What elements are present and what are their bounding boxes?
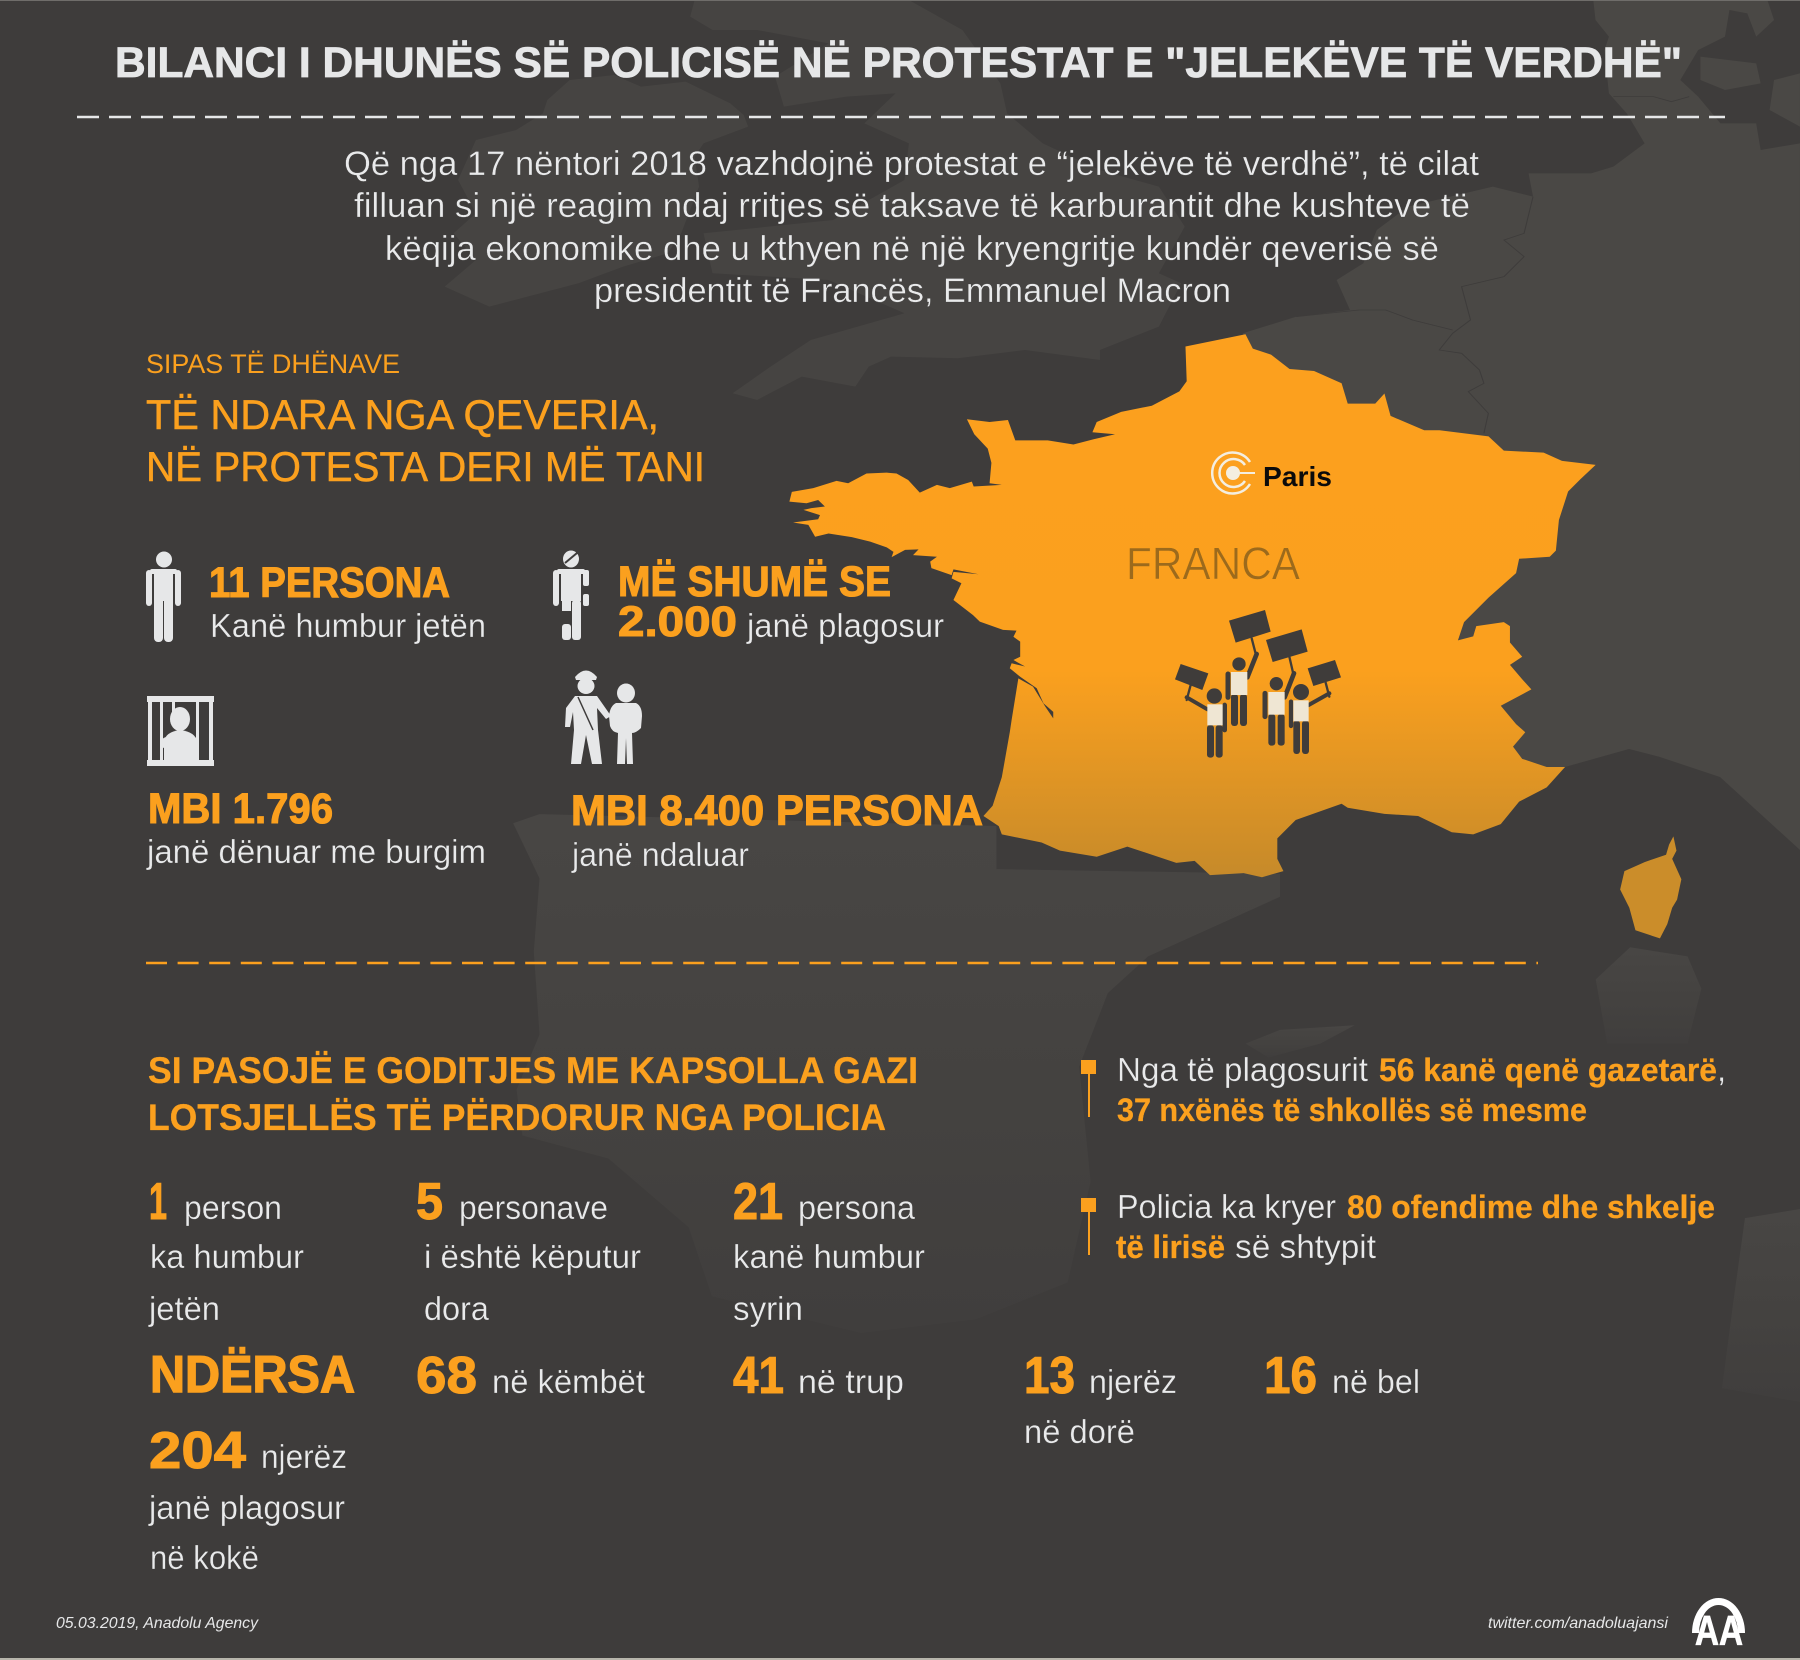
Corsica xyxy=(1620,836,1681,938)
stat: 204 injured in the head: në kokë xyxy=(150,1539,259,1576)
stat: 16 in waist: në bel xyxy=(1332,1363,1420,1400)
stat: 41 in body: në trup xyxy=(798,1363,904,1400)
stat: 204 injured in the head: 204 xyxy=(149,1422,246,1480)
bullet: press freedom violations: së shtypit xyxy=(1235,1228,1376,1265)
stat: sentenced to prison xyxy=(146,785,486,870)
bullet: journalists and students: Nga të plagosurit xyxy=(1117,1051,1368,1088)
stat: 41 in body xyxy=(733,1347,904,1405)
stat: 68 in legs: 68 xyxy=(416,1347,477,1405)
stat: 1 person lost life: 1 xyxy=(149,1173,167,1231)
stat: 5 persons lost a hand: 5 xyxy=(416,1173,443,1231)
heading: consequences of tear gas capsules: SI PASOJË E GODITJES ME KAPSOLLA GAZI xyxy=(148,1050,918,1091)
icon: prisoner behind bars xyxy=(147,696,214,766)
stat: 13 in hand: 13 xyxy=(1024,1347,1075,1405)
stat: 1 person lost life: ka humbur xyxy=(150,1238,304,1275)
stat: 21 persons lost an eye: persona xyxy=(798,1189,916,1226)
stat: 5 persons lost a hand xyxy=(416,1173,641,1327)
icon: protesters with signs xyxy=(1175,610,1341,758)
bullet: journalists and students: , xyxy=(1717,1051,1726,1088)
stat: 13 in hand: njerëz xyxy=(1089,1363,1177,1400)
stat: 21 persons lost an eye xyxy=(733,1173,925,1327)
stat: over 2000 injured: 2.000 xyxy=(618,598,737,646)
intro paragraph xyxy=(344,145,1480,310)
stat: 16 in waist: 16 xyxy=(1264,1347,1317,1405)
stat: 1 person lost life: person xyxy=(184,1189,282,1226)
stat: sentenced to prison: janë dënuar me burgim xyxy=(146,833,486,870)
stat: 1 person lost life xyxy=(148,1173,304,1327)
bullet: press freedom violations: Policia ka kryer xyxy=(1117,1188,1336,1225)
intro paragraph: Që nga 17 nëntori 2018 vazhdojnë protestat e “jelekëve të verdhë”, të cilat xyxy=(344,145,1480,183)
mainland France xyxy=(789,334,1596,877)
stat: 11 persons: Kanë humbur jetën xyxy=(210,607,486,644)
intro paragraph: presidentit të Francës, Emmanuel Macron xyxy=(594,272,1231,310)
stat: 13 in hand xyxy=(1024,1347,1177,1450)
heading: government data: SIPAS TË DHËNAVE xyxy=(146,349,400,379)
intro paragraph: këqija ekonomike dhe u kthyen në një kryengritje kundër qeverisë së xyxy=(385,230,1439,268)
footer: twitter handle: twitter.com/anadoluajansi xyxy=(1488,1615,1668,1632)
bullet: journalists and students: 37 nxënës të shkollës së mesme xyxy=(1117,1092,1587,1128)
footer: date and source: 05.03.2019, Anadolu Agency xyxy=(56,1615,259,1632)
stat: 204 injured in the head: janë plagosur xyxy=(148,1489,345,1526)
bullet: press freedom violations: 80 ofendime dhe shkelje xyxy=(1347,1189,1715,1225)
stat: over 8400 arrested: janë ndaluar xyxy=(571,836,749,873)
icon: police officer with detainee xyxy=(565,670,642,764)
label: France: FRANCA xyxy=(1126,538,1300,589)
stat: 21 persons lost an eye: syrin xyxy=(733,1290,803,1327)
stat: 11 persons: 11 PERSONA xyxy=(209,559,450,607)
intro paragraph: filluan si një reagim ndaj rritjes së taksave të karburantit dhe kushteve të xyxy=(354,187,1470,225)
title: BILANCI I DHUNËS SË POLICISË NË PROTESTAT E "JELEKËVE TË VERDHË" xyxy=(115,39,1682,87)
icon: person xyxy=(146,552,181,642)
bullet: press freedom violations: të lirisë xyxy=(1116,1229,1225,1265)
icon: injured person xyxy=(553,550,589,640)
stat: 21 persons lost an eye: kanë humbur xyxy=(733,1238,925,1275)
heading: government data: NË PROTESTA DERI MË TANI xyxy=(146,443,705,490)
heading: government data xyxy=(146,349,705,490)
bullet: press freedom violations xyxy=(1081,1188,1715,1265)
icon: Anadolu Agency logo xyxy=(1692,1598,1745,1654)
stat: 68 in legs xyxy=(416,1347,645,1405)
stat: 41 in body: 41 xyxy=(733,1347,784,1405)
bullet: journalists and students xyxy=(1081,1051,1726,1128)
stat: 5 persons lost a hand: personave xyxy=(459,1189,608,1226)
heading: government data: TË NDARA NGA QEVERIA, xyxy=(146,391,659,438)
stat: over 2000 injured: MË SHUMË SE xyxy=(618,558,891,606)
stat: 204 injured in the head xyxy=(148,1422,347,1576)
map of France xyxy=(789,334,1681,938)
stat: 21 persons lost an eye: 21 xyxy=(733,1173,783,1231)
stat: 5 persons lost a hand: i është këputur xyxy=(424,1238,641,1275)
bullet: journalists and students: 56 kanë qenë gazetarë xyxy=(1379,1052,1717,1088)
heading: consequences of tear gas capsules xyxy=(148,1050,918,1138)
stat: over 2000 injured: janë plagosur xyxy=(746,607,944,644)
stat: 13 in hand: në dorë xyxy=(1024,1413,1135,1450)
stat: 204 injured in the head: njerëz xyxy=(261,1438,347,1475)
icon: Anadolu Agency logo: AA xyxy=(1695,1607,1743,1654)
icon: Paris marker xyxy=(1212,452,1255,493)
stat: sentenced to prison: MBI 1.796 xyxy=(148,785,333,833)
heading: consequences of tear gas capsules: LOTSJELLËS TË PËRDORUR NGA POLICIA xyxy=(148,1097,886,1138)
stat: 16 in waist xyxy=(1264,1347,1420,1405)
stat: over 2000 injured xyxy=(618,558,944,646)
stat: 68 in legs: në këmbët xyxy=(492,1363,645,1400)
stat: over 8400 arrested: MBI 8.400 PERSONA xyxy=(571,787,983,835)
label: while: NDËRSA xyxy=(150,1346,355,1404)
label: Paris: Paris xyxy=(1263,461,1332,492)
stat: over 8400 arrested xyxy=(571,787,983,873)
stat: 1 person lost life: jetën xyxy=(148,1290,220,1327)
stat: 5 persons lost a hand: dora xyxy=(424,1290,490,1327)
stat: 11 persons xyxy=(209,559,486,644)
